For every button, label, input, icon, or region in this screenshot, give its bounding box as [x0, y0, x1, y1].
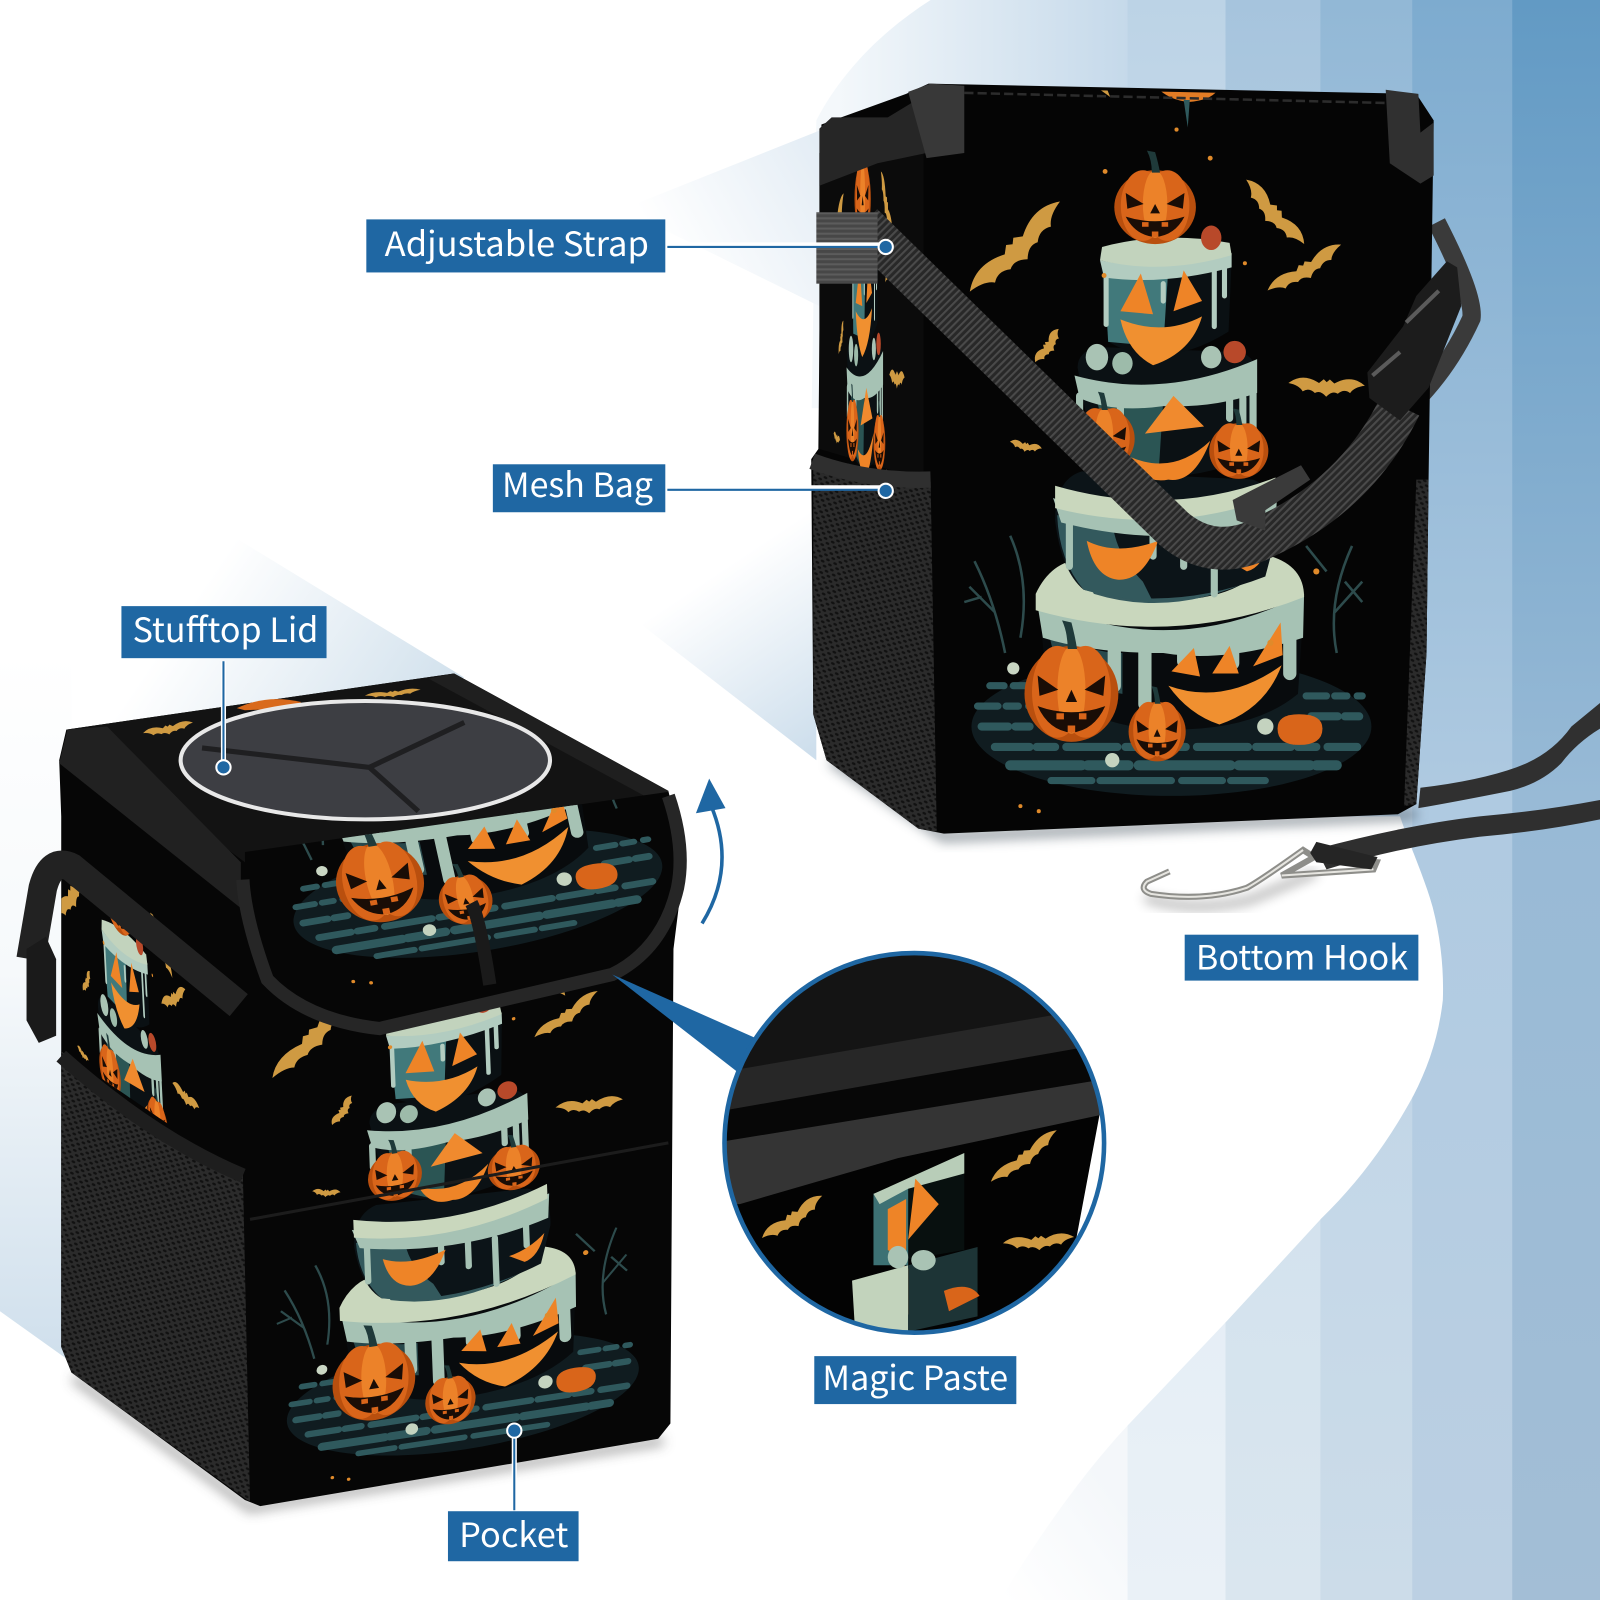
left side strap — [31, 865, 239, 1005]
bag drop shadow — [832, 760, 1416, 837]
closeup cake lower tier — [852, 1265, 908, 1332]
label: Magic Paste: Magic Paste — [822, 1351, 1008, 1400]
hook highlight — [1144, 850, 1373, 897]
stuff-top oval opening — [181, 701, 550, 819]
mesh side pocket — [813, 457, 937, 832]
product: lower trash bag — [16, 674, 687, 1520]
circle base — [723, 952, 1105, 1334]
main strap — [862, 224, 1400, 548]
hook grip — [1310, 842, 1378, 869]
lid top bat left — [142, 719, 194, 740]
leader: Stufftop Lid — [216, 661, 231, 774]
arrow: lid opens upward — [696, 779, 726, 923]
label: Adjustable Strap: Adjustable Strap — [385, 217, 649, 266]
bag body — [811, 84, 1434, 834]
front corner binding — [1386, 90, 1434, 184]
front print — [272, 991, 639, 1481]
top print pumpkin fragment — [1100, 90, 1216, 127]
leader: Adjustable Strap — [667, 240, 893, 254]
background: lower wedge left of upper bag — [612, 408, 816, 760]
label: Bottom Hook: Bottom Hook — [1196, 930, 1409, 979]
right mesh edge — [1404, 480, 1429, 806]
background: wedge behind lower bag — [41, 500, 464, 776]
label: Mesh Bag: Mesh Bag — [502, 458, 653, 507]
background: wedge left of lower bag — [0, 653, 71, 1362]
strap keeper — [1233, 465, 1310, 531]
upper hem band — [730, 1016, 1076, 1110]
side buckle — [1367, 261, 1461, 420]
side panel — [819, 128, 923, 480]
metal hook — [1144, 850, 1377, 897]
white cut-out on right — [1076, 1115, 1102, 1237]
product: long straps with hook — [1144, 703, 1600, 906]
strap loop — [816, 212, 878, 284]
hook shadow — [1145, 872, 1316, 906]
lid top print bit — [237, 699, 301, 710]
flap print — [292, 800, 662, 984]
callout pointer to magic paste — [612, 974, 757, 1071]
circle ring — [724, 953, 1104, 1333]
label: Pocket: Pocket — [459, 1508, 569, 1557]
product: upper trash bag — [811, 84, 1472, 837]
left buckle — [27, 937, 56, 1043]
flap pull cord — [471, 903, 490, 985]
detail circle: magic paste close-up — [714, 952, 1112, 1347]
lid flap — [245, 792, 680, 1029]
background: wedge left of upper bag — [622, 131, 819, 306]
lid binding right — [429, 673, 668, 806]
flap binding — [243, 796, 680, 1029]
lid top bat right — [365, 688, 421, 700]
buckle highlight — [1372, 291, 1439, 376]
bag body — [59, 673, 684, 1506]
lid top panel — [66, 673, 668, 862]
slit cuts — [202, 722, 464, 811]
oval disc — [181, 701, 550, 819]
leader: Mesh Bag — [667, 484, 893, 498]
top stitch line — [964, 93, 1390, 103]
label: Stufftop Lid: Stufftop Lid — [133, 603, 318, 652]
closeup cake upper tier — [908, 1174, 964, 1260]
pocket seam — [250, 1143, 668, 1219]
lower strap — [1316, 800, 1600, 869]
mesh pocket — [61, 1051, 250, 1502]
magic tape band — [714, 1080, 1104, 1204]
side print — [834, 167, 905, 470]
mesh elastic — [812, 461, 931, 480]
front print — [964, 87, 1371, 813]
background: blue stripe bands — [806, 0, 1600, 1600]
rear corner binding — [908, 84, 964, 158]
black stripe — [727, 1048, 1091, 1140]
rear strap — [1413, 222, 1472, 403]
leader: Pocket — [507, 1423, 521, 1510]
left side print — [61, 886, 200, 1124]
printed lower area — [737, 1116, 1100, 1330]
side top fold — [819, 94, 927, 186]
lid binding back — [59, 727, 241, 908]
upper strap — [1418, 703, 1600, 808]
mesh elastic — [61, 1056, 243, 1176]
bag drop shadow — [73, 1378, 663, 1508]
